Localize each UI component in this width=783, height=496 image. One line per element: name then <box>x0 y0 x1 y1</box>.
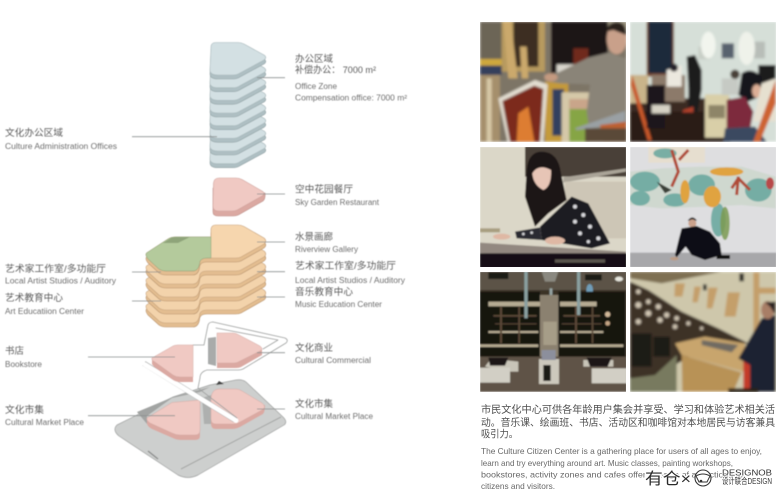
label: office zone: Office Zone <box>295 82 338 91</box>
diagram: bookstore block <box>152 345 193 382</box>
text block: English description: The Culture Citizen Center is a gathering place for users of all ages to enjoy, <box>481 446 762 456</box>
panel: axonometric building diagram <box>5 42 407 478</box>
icon: round logo <box>695 470 711 486</box>
label: cultural market place right: Cultural Market Place <box>295 412 374 421</box>
label: cultural commercial: Cultural Commercial <box>295 356 371 365</box>
photo: woman playing guzheng <box>480 147 627 268</box>
text block: Chinese description: 市民文化中心可供各年龄用户集会并享受、学习和体验艺术相关活 <box>481 403 775 416</box>
label: cultural commercial <box>295 342 371 365</box>
label: cultural market place left: Cultural Market Place <box>5 418 85 427</box>
label: office zone: 补偿办公： 7000 m² <box>295 64 377 76</box>
label: art education center: 艺术教育中心 <box>5 292 63 304</box>
diagram: ground plate <box>115 380 286 478</box>
label: artist studios left <box>5 263 116 286</box>
label: music education center: 音乐教育中心 <box>295 286 353 298</box>
label: cultural market place right <box>295 398 374 421</box>
photo: lecture hall with speaker <box>630 272 777 392</box>
label: bookstore: Bookstore <box>5 360 43 369</box>
diagram: white walkway <box>144 322 287 420</box>
diagram: gallery and studio floors <box>146 225 266 327</box>
label: cultural market place right: 文化市集 <box>295 398 333 410</box>
label: cultural market place left: 文化市集 <box>5 404 44 416</box>
roof garden <box>146 237 211 271</box>
label: office zone: Compensation office: 7000 m² <box>295 94 407 102</box>
photo: art class studio <box>630 22 777 142</box>
label: cultural market place left <box>5 404 85 427</box>
label: office zone <box>295 53 407 102</box>
text block: English description <box>481 446 762 491</box>
photo: painter with canvases <box>480 22 627 142</box>
leader lines <box>88 78 285 416</box>
label: culture administration offices: 文化办公区域 <box>5 127 63 139</box>
label: sky garden restaurant <box>295 184 380 207</box>
watermark: logo and site name <box>645 468 772 488</box>
label: artist studios right <box>295 260 405 285</box>
diagram: office tower floors <box>210 42 266 168</box>
label: bookstore: 书店 <box>5 345 24 357</box>
label: music education center <box>295 286 382 309</box>
label: culture administration offices: Culture Administration Offices <box>5 142 117 151</box>
label: riverview gallery: Riverview Gallery <box>295 245 358 254</box>
photo: man in front of mural <box>630 147 777 268</box>
label: sky garden restaurant: Sky Garden Restaurant <box>295 198 380 207</box>
label: artist studios right: Local Artist Studios / Auditory <box>295 276 405 285</box>
label: office zone: 办公区域 <box>295 53 333 65</box>
diagram: cultural market place blocks <box>147 389 265 440</box>
label: bookstore <box>5 345 43 369</box>
text block: English description: citizens and visitors. <box>481 481 555 491</box>
text block: Chinese description <box>481 403 775 440</box>
label: culture administration offices <box>5 127 117 151</box>
watermark: logo and site name: 有仓× <box>645 470 691 488</box>
label: art education center <box>5 292 84 316</box>
text block: English description: bookstores, activity zones and cafes offer a range of attractions to <box>481 470 743 480</box>
text block: Chinese description: 吸引力。 <box>481 428 518 440</box>
label: sky garden restaurant: 空中花园餐厅 <box>295 184 353 196</box>
label: music education center: Music Education Center <box>295 300 382 309</box>
label: artist studios right: 艺术家工作室/多功能厅 <box>295 260 396 272</box>
label: riverview gallery <box>295 231 358 254</box>
label: artist studios left: Local Artist Studios / Auditory <box>5 276 116 286</box>
diagram: sky garden restaurant block <box>213 178 265 216</box>
text block: English description: learn and try everything around art. Music classes, painting workshops, <box>481 458 733 468</box>
text block: Chinese description: 动。音乐课、绘画班、书店、活动区和咖啡馆对本地居民与访客兼具 <box>481 416 775 429</box>
diagram: cultural commercial block <box>217 333 262 368</box>
photo: bookstore interior <box>480 272 627 392</box>
watermark: logo and site name: DESIGNOB <box>722 468 772 478</box>
label: cultural commercial: 文化商业 <box>295 342 333 354</box>
label: riverview gallery: 水景画廊 <box>295 231 333 243</box>
label: artist studios left: 艺术家工作室/多功能厅 <box>5 263 106 275</box>
label: art education center: Art Educatiion Center <box>5 307 84 316</box>
